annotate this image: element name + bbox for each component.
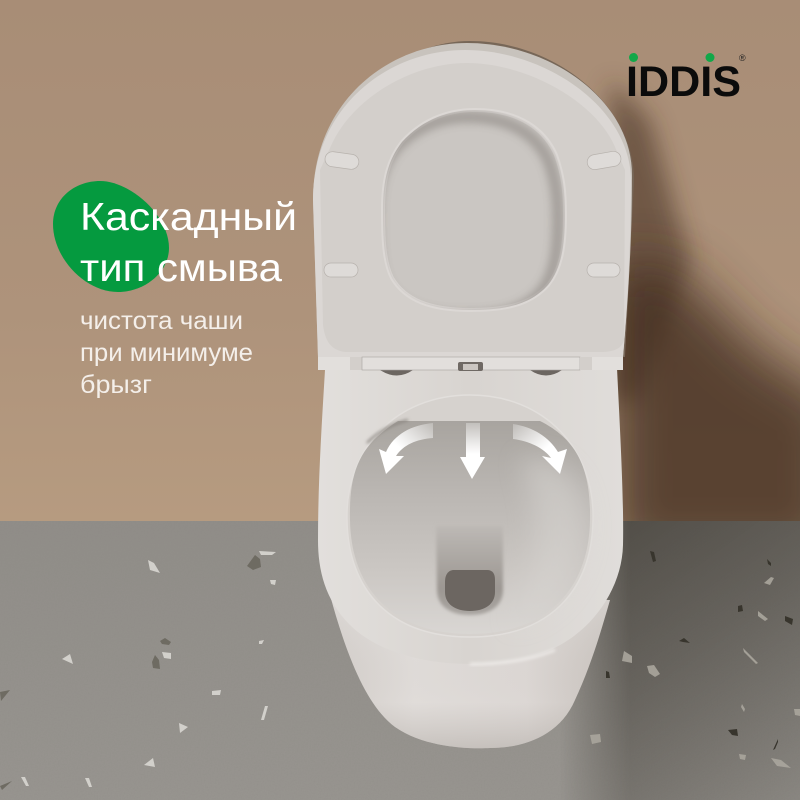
heading: Каскадный (80, 196, 297, 239)
logo: IDDIS: IDDIS (626, 58, 741, 106)
inner bowl surface (350, 421, 590, 634)
toilet bowl (318, 368, 623, 748)
seat bumpers (324, 151, 360, 170)
subheading: чистота чаши (80, 307, 243, 335)
seat ring (383, 110, 565, 310)
wall background (0, 0, 800, 521)
green blob (53, 181, 169, 292)
rim front highlight (470, 650, 555, 664)
seat opening inner shadow (376, 117, 558, 317)
light right side of bowl (510, 458, 586, 625)
wall shadow cast by the toilet (610, 80, 800, 560)
subheading (80, 307, 253, 399)
arrow: left curved (379, 423, 433, 474)
raised seat lid (313, 41, 634, 371)
hinge bolts (380, 370, 562, 376)
drain hole (445, 570, 495, 611)
subheading: при минимуме (80, 339, 253, 367)
floor with terrazzo chips (0, 521, 800, 800)
floor shadow (571, 521, 800, 800)
arrow: right curved (513, 424, 567, 474)
bowl rim (318, 368, 623, 664)
logo: IDDIS: ® (739, 53, 746, 63)
lid recess (320, 63, 625, 352)
slit under rim (367, 420, 408, 443)
inner bowl edge (347, 395, 593, 637)
heading (80, 196, 297, 290)
drain channel (436, 526, 503, 615)
subheading: брызг (80, 371, 152, 399)
lower ceramic body (330, 595, 610, 748)
lid rim (313, 50, 631, 357)
cascade flush arrows (379, 423, 567, 479)
hinge strip (318, 357, 350, 370)
back edge of lid (316, 41, 634, 357)
arrow: centre down (460, 423, 485, 479)
heading: тип смыва (80, 247, 282, 290)
hinge clasp (458, 362, 483, 371)
